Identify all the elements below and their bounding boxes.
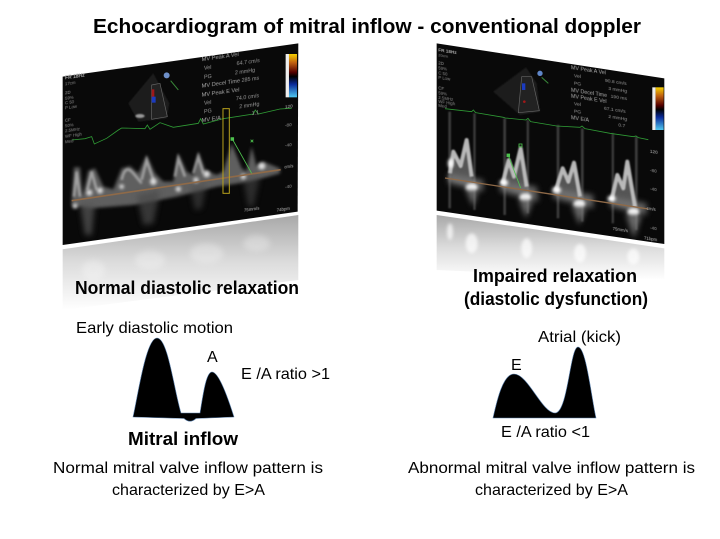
- measurement text: 2D: [438, 60, 444, 66]
- measurement text: 1.1: [252, 110, 259, 117]
- label: impaired relaxation: Impaired relaxation: [473, 266, 637, 286]
- measurement text: WF High: [65, 131, 82, 139]
- measurement text: -40: [285, 142, 292, 148]
- measurement text: 2.5MHz: [65, 126, 80, 134]
- measurement text: Med: [438, 103, 447, 109]
- measurement text: 2D: [65, 90, 71, 96]
- measurement text: 2 mmHg: [608, 114, 627, 123]
- label: normal diastolic relaxation: Normal diastolic relaxation: [75, 278, 299, 298]
- measurement text: -40: [285, 184, 292, 190]
- text: abnormal description: Abnormal mitral valve inflow pattern is: [408, 460, 695, 477]
- measurement text: FR 18Hz: [438, 47, 457, 55]
- text: normal description: [53, 460, 323, 499]
- label: E/A ratio less than 1: E /A ratio <1: [501, 424, 590, 441]
- panel: normal echocardiogram: [63, 43, 298, 310]
- frame edge: [63, 214, 298, 247]
- sample gate: [223, 109, 229, 193]
- measurement text: MV Decel Time: [202, 78, 240, 90]
- baseline: [72, 170, 281, 201]
- measurement text: PG: [574, 81, 581, 88]
- text: abnormal description: characterized by E>A: [475, 482, 628, 499]
- measurement text: 120: [285, 104, 293, 110]
- label: impaired relaxation: (diastolic dysfunction): [464, 289, 648, 309]
- text: normal description: characterized by E>A: [112, 482, 265, 499]
- measurement text: PG: [204, 74, 212, 81]
- measurement text: 59%: [438, 90, 447, 97]
- measurement text: 74.0 cm/s: [236, 93, 259, 102]
- measurement text: MV Peak A Vel: [571, 65, 606, 76]
- label: E: E: [511, 357, 522, 374]
- measurement text: [65, 43, 294, 242]
- measurement text: 285 ms: [242, 76, 259, 84]
- measurement markers: [507, 144, 522, 188]
- measurement text: P Low: [438, 75, 451, 82]
- measurement text: 59%: [438, 65, 447, 72]
- measurement text: Vel: [574, 73, 581, 80]
- measurement text: 120: [650, 149, 658, 155]
- baseline: [445, 178, 648, 209]
- measurement text: MV Decel Time: [571, 87, 607, 99]
- measurement text: CF: [438, 85, 444, 91]
- label: E/A ratio greater than 1: E /A ratio >1: [241, 366, 330, 383]
- measurement markers: [231, 138, 253, 173]
- measurement text: MV Peak A Vel: [202, 52, 239, 63]
- measurement text: 90.8 cm/s: [605, 78, 627, 87]
- reflection: impaired echo: [437, 215, 664, 280]
- measurement text: C 50: [65, 99, 75, 106]
- mini heart sector: [128, 72, 178, 122]
- measurement text: PG: [574, 109, 581, 116]
- measurement text: cm/s: [647, 206, 657, 212]
- measurement text: 67.1 cm/s: [604, 106, 626, 115]
- title: Echocardiogram of mitral inflow - conventional doppler: [93, 15, 641, 38]
- measurement text: 75mm/s: [244, 205, 260, 213]
- measurement text: 0.7: [618, 122, 625, 129]
- measurement text: cm/s: [284, 163, 294, 169]
- measurement text: 20cm: [438, 52, 449, 59]
- measurement text: 2 mmHg: [239, 102, 259, 110]
- colour bar: [286, 54, 297, 97]
- measurement text: MV E/A: [571, 115, 589, 124]
- text: abnormal description: [408, 460, 695, 499]
- measurement text: C 50: [438, 70, 448, 77]
- chart: normal mitral inflow curve: [133, 338, 234, 421]
- measurement text: 74bpm: [277, 206, 290, 212]
- measurement text: CF: [65, 117, 71, 123]
- measurement text: WF High: [438, 99, 456, 106]
- colour bar: [652, 87, 664, 130]
- measurement text: 3 mmHg: [608, 86, 627, 95]
- frame edge: [437, 213, 664, 246]
- label: early diastolic motion: Early diastolic motion: [76, 320, 233, 337]
- doppler waveform: [448, 112, 647, 238]
- reflection: normal echo: [63, 215, 298, 310]
- heading: mitral inflow: Mitral inflow: [128, 428, 239, 449]
- measurement text: -40: [650, 225, 657, 231]
- measurement text: PG: [204, 108, 212, 115]
- measurement text: MV E/A: [202, 115, 221, 124]
- chart: impaired mitral inflow curve: [493, 347, 596, 418]
- measurement text: 59%: [65, 95, 74, 101]
- measurement text: -80: [650, 168, 657, 174]
- measurement text: Vel: [204, 100, 211, 107]
- measurement text: 2.5MHz: [438, 95, 453, 102]
- measurement text: Vel: [574, 101, 581, 108]
- echo frame: [63, 43, 298, 245]
- label: atrial kick: Atrial (kick): [538, 329, 621, 346]
- measurement text: Vel: [204, 65, 211, 72]
- measurement text: -80: [285, 122, 292, 128]
- doppler waveform: [72, 143, 280, 235]
- label: A: A: [207, 349, 218, 366]
- echo frame: [437, 43, 664, 244]
- measurement text: Med: [65, 138, 74, 144]
- measurement text: P Low: [65, 104, 78, 111]
- panel: impaired echocardiogram: [437, 43, 664, 280]
- measurement text: [438, 45, 658, 242]
- label: impaired relaxation: [464, 266, 648, 309]
- measurement text: FR 18Hz: [65, 73, 85, 82]
- measurement text: 64.7 cm/s: [237, 58, 260, 67]
- ecg trace: [72, 108, 292, 144]
- measurement text: -40: [650, 186, 657, 192]
- measurement text: MV Peak E Vel: [571, 93, 607, 105]
- text: normal description: Normal mitral valve inflow pattern is: [53, 460, 323, 477]
- measurement text: MV Peak E Vel: [202, 87, 239, 99]
- measurement text: 75mm/s: [613, 226, 629, 234]
- ecg trace: [445, 109, 648, 140]
- measurement text: 17cm: [65, 80, 76, 86]
- measurement text: 50%: [65, 122, 74, 128]
- measurement text: 2 mmHg: [235, 68, 255, 77]
- mini heart sector: [493, 67, 548, 115]
- measurement text: 71bpm: [644, 235, 658, 242]
- measurement text: 190 ms: [611, 94, 627, 102]
